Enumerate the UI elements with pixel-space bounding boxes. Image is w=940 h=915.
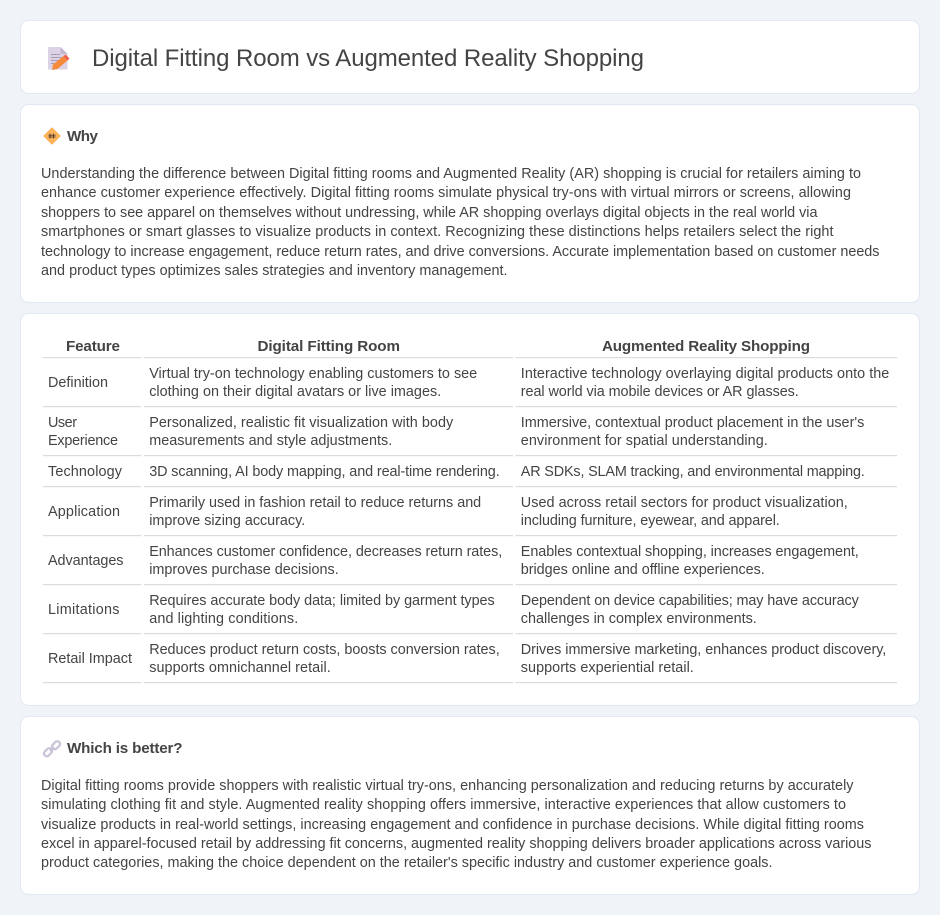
text block: why paragraph: Understanding the difference between Digital fitting rooms and Augmented Reality (AR) shopping is crucial for retailers aiming to bbox=[41, 166, 861, 182]
row: retail impact: Retail Impact bbox=[48, 651, 132, 667]
row: application: Primarily used in fashion retail to reduce returns and bbox=[149, 495, 481, 511]
title: Digital Fitting Room vs Augmented Reality Shopping bbox=[92, 45, 644, 72]
row: application: Application bbox=[48, 504, 120, 520]
row: definition: Virtual try-on technology enabling customers to see bbox=[149, 366, 477, 382]
row: application bbox=[48, 495, 848, 529]
row: user experience: Personalized, realistic fit visualization with body bbox=[149, 415, 454, 431]
row: application: Used across retail sectors for product visualization, bbox=[521, 495, 848, 511]
row: retail impact bbox=[48, 642, 886, 676]
text block: which is better paragraph: simulating clothing fit and style. Augmented reality shopping offers immersive, interactive experiences that allow customers to bbox=[41, 797, 846, 813]
row: user experience: Experience bbox=[48, 433, 118, 449]
panel: title header bbox=[20, 20, 920, 94]
row: user experience: Immersive, contextual product placement in the user's bbox=[521, 415, 864, 431]
row: technology: 3D scanning, AI body mapping, and real-time rendering. bbox=[149, 464, 500, 480]
row: retail impact: Drives immersive marketing, enhances product discovery, bbox=[521, 642, 886, 658]
table header: Augmented Reality Shopping bbox=[602, 338, 810, 355]
row: retail impact: Reduces product return costs, boosts conversion rates, bbox=[149, 642, 500, 658]
text block: which is better paragraph: product categories, making the choice dependent on the retailer's specific industry and customer experience goals. bbox=[41, 855, 772, 871]
row: advantages: bridges online and offline experiences. bbox=[521, 562, 765, 578]
row: limitations: challenges in complex environments. bbox=[521, 611, 757, 627]
row: technology: Technology bbox=[48, 464, 123, 480]
panel: why bbox=[20, 104, 920, 302]
row: user experience: User bbox=[48, 415, 77, 431]
icon: link bbox=[43, 740, 61, 757]
row: definition: clothing on their digital avatars or live images. bbox=[149, 384, 441, 400]
heading: which is better: Which is better? bbox=[67, 740, 182, 757]
text block: which is better paragraph: Digital fitting rooms provide shoppers with realistic virtual try-ons, enhancing personalization and reducing returns by accurately bbox=[41, 778, 854, 794]
table header bbox=[66, 338, 810, 355]
row: technology: AR SDKs, SLAM tracking, and environmental mapping. bbox=[521, 464, 865, 480]
row: advantages: Enables contextual shopping, increases engagement, bbox=[521, 544, 859, 560]
row: user experience bbox=[48, 415, 864, 449]
heading: why: Why bbox=[67, 128, 99, 145]
text block: why paragraph bbox=[41, 166, 880, 279]
row: definition: Interactive technology overlaying digital products onto the bbox=[521, 366, 889, 382]
panel: comparison table bbox=[20, 314, 920, 706]
row: retail impact: supports experiential retail. bbox=[521, 660, 694, 676]
row: limitations: Dependent on device capabilities; may have accuracy bbox=[521, 593, 860, 609]
row: application: improve sizing accuracy. bbox=[149, 513, 305, 529]
table header: Digital Fitting Room bbox=[258, 338, 400, 355]
icon: memo and pencil bbox=[48, 47, 70, 70]
text block: why paragraph: smartphones or smart glasses to visualize products in context. Recognizing these distinctions helps retailers select the right bbox=[41, 224, 834, 240]
row: retail impact: supports omnichannel retail. bbox=[149, 660, 331, 676]
text block: why paragraph: and product types optimizes sales strategies and inventory management. bbox=[41, 263, 508, 279]
text block: why paragraph: technology to increase engagement, reduce return rates, and drive conversions. Accurate implementation based on customer needs bbox=[41, 244, 880, 260]
row: definition bbox=[48, 366, 889, 400]
row: limitations: and lighting conditions. bbox=[149, 611, 298, 627]
text block: why paragraph: enhance customer experience effectively. Digital fitting rooms simulate physical try-ons with virtual mirrors or screens, allowing bbox=[41, 185, 851, 201]
row: advantages: Advantages bbox=[48, 553, 124, 569]
row: user experience: environment for spatial understanding. bbox=[521, 433, 768, 449]
row: limitations: Requires accurate body data; limited by garment types bbox=[149, 593, 495, 609]
row: limitations: Limitations bbox=[48, 602, 120, 618]
panel: which is better bbox=[20, 716, 920, 894]
icon: warning diamond bbox=[44, 128, 60, 144]
row: definition: Definition bbox=[48, 375, 108, 391]
row: definition: real world via mobile devices or AR glasses. bbox=[521, 384, 799, 400]
row: advantages: Enhances customer confidence, decreases return rates, bbox=[149, 544, 502, 560]
row: technology bbox=[48, 464, 865, 480]
row: user experience: measurements and style adjustments. bbox=[149, 433, 392, 449]
row: limitations bbox=[48, 593, 860, 627]
text block: why paragraph: shoppers to see apparel on themselves without undressing, while AR shopping overlays digital objects in the real world via bbox=[41, 205, 818, 221]
text block: which is better paragraph bbox=[41, 778, 872, 871]
text block: which is better paragraph: visualize products in real-world settings, increasing engagement and confidence in purchase decisions. While digital fitting rooms bbox=[41, 817, 864, 833]
text block: which is better paragraph: excel in apparel-focused retail by addressing fit concerns, augmented reality shopping delivers broader applications across various bbox=[41, 836, 872, 852]
table header: Feature bbox=[66, 338, 120, 355]
row: application: including furniture, eyewear, and apparel. bbox=[521, 513, 780, 529]
row: advantages bbox=[48, 544, 859, 578]
row: advantages: improves purchase decisions. bbox=[149, 562, 339, 578]
